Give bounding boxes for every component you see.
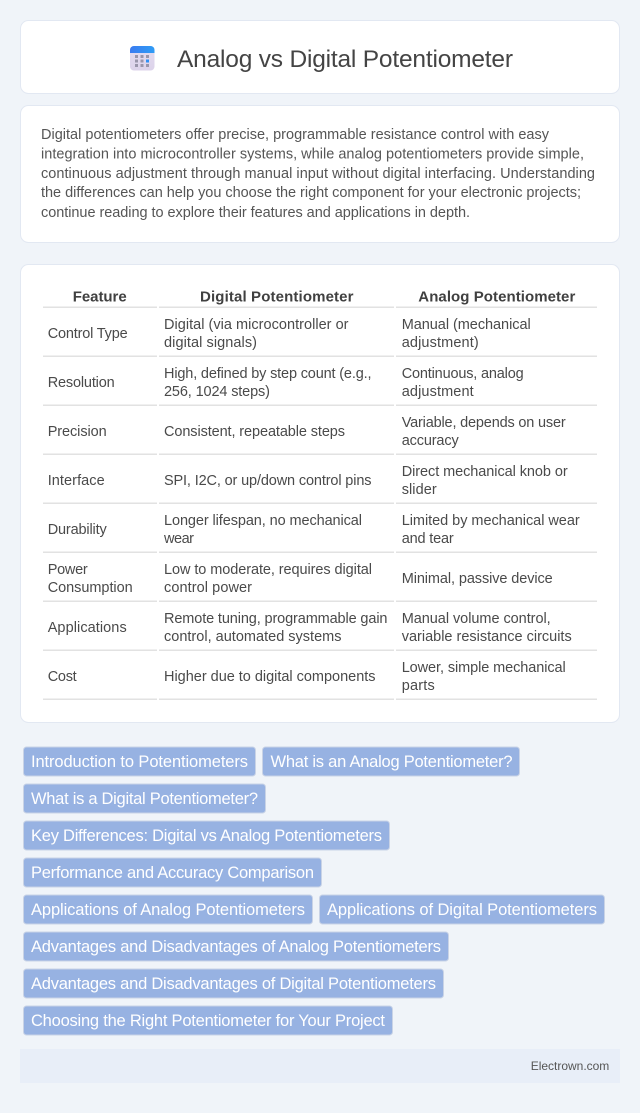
row: interface [43, 464, 597, 503]
text block: introduction [41, 127, 595, 221]
row: durability: and tear [402, 531, 454, 547]
row: control type: Digital (via microcontroller or [164, 317, 349, 333]
row: power consumption: Low to moderate, requires digital [164, 562, 372, 578]
row: precision [43, 415, 597, 454]
title: Analog vs Digital Potentiometer [177, 46, 513, 73]
row: resolution: Resolution [48, 375, 115, 391]
row: control type [43, 317, 597, 356]
row: resolution: adjustment [402, 384, 474, 400]
row: cost: Higher due to digital components [164, 669, 376, 685]
row: cost: parts [402, 678, 435, 694]
table header: Feature [73, 289, 127, 306]
text block: introduction: integration into microcontroller systems, while analog potentiometers provide simple, [41, 146, 584, 162]
tag: performance: Performance and Accuracy Comparison [31, 864, 314, 882]
row: precision: Consistent, repeatable steps [164, 424, 345, 440]
row: durability: Longer lifespan, no mechanical [164, 513, 362, 529]
row: power consumption: Minimal, passive device [402, 571, 553, 587]
tag: digital pros and cons: Advantages and Disadvantages of Digital Potentiometers [31, 975, 436, 993]
tag: digital pros and cons [24, 969, 444, 998]
row: interface: Direct mechanical knob or [402, 464, 568, 480]
row: applications: Applications [48, 620, 127, 636]
row: interface: Interface [48, 473, 105, 489]
row: resolution: High, defined by step count (e.g., [164, 366, 372, 382]
tag: analog applications [24, 895, 312, 924]
row: cost [43, 660, 597, 699]
row: durability: Limited by mechanical wear [402, 513, 580, 529]
row: control type: digital signals) [164, 335, 257, 351]
panel: header [20, 20, 620, 94]
tag: introduction [24, 747, 256, 776]
row: durability: Durability [48, 522, 107, 538]
table header: Analog Potentiometer [418, 289, 575, 306]
table header [43, 289, 597, 307]
text block: introduction: continuous adjustment through manual input without digital interfacing. Understanding [41, 166, 595, 182]
row: interface: SPI, I2C, or up/down control pins [164, 473, 372, 489]
tag: choosing [24, 1006, 392, 1035]
panel: introduction [20, 106, 620, 242]
icon: calendar [130, 46, 154, 70]
row: durability: wear [163, 531, 194, 547]
row: durability [43, 513, 597, 552]
panel: comparison table [20, 264, 620, 722]
row: applications: Remote tuning, programmable gain [164, 611, 388, 627]
row: power consumption: Consumption [48, 580, 133, 596]
text block: introduction: continue reading to explore their features and applications in depth. [41, 205, 470, 221]
tag: key differences [24, 821, 390, 850]
row: applications: control, automated systems [164, 629, 342, 645]
tag: digital definition [24, 784, 266, 813]
row: precision: accuracy [402, 433, 459, 449]
row: resolution: 256, 1024 steps) [164, 384, 270, 400]
tag: analog applications: Applications of Analog Potentiometers [31, 901, 305, 919]
tag: digital definition: What is a Digital Potentiometer? [31, 790, 258, 808]
row: applications: Manual volume control, [402, 611, 551, 627]
row: applications: variable resistance circuits [402, 629, 572, 645]
row: control type: Manual (mechanical [402, 317, 531, 333]
tag: introduction: Introduction to Potentiometers [31, 753, 248, 771]
tag: choosing: Choosing the Right Potentiometer for Your Project [31, 1012, 385, 1030]
tag: analog pros and cons [24, 932, 448, 961]
tag: analog definition [262, 747, 520, 776]
row: power consumption [43, 562, 597, 601]
table header: Digital Potentiometer [200, 289, 354, 306]
footer [20, 1049, 620, 1083]
tag: analog definition: What is an Analog Potentiometer? [270, 753, 512, 771]
tag: performance [24, 858, 322, 887]
row: power consumption: control power [164, 580, 252, 596]
row: cost: Cost [48, 669, 77, 685]
row: applications [43, 611, 597, 650]
footer credit: Electrown.com [531, 1059, 609, 1073]
row: precision: Precision [48, 424, 107, 440]
row: interface: slider [402, 482, 437, 498]
text block: introduction: the differences can help you choose the right component for your electronic projects; [41, 185, 581, 201]
row: control type: adjustment) [402, 335, 479, 351]
text block: introduction: Digital potentiometers offer precise, programmable resistance control with easy [41, 127, 550, 143]
tag: key differences: Key Differences: Digital vs Analog Potentiometers [31, 827, 382, 845]
navigation tags [24, 747, 604, 1035]
row: cost: Lower, simple mechanical [402, 660, 566, 676]
tag: digital applications: Applications of Digital Potentiometers [327, 901, 597, 919]
tag: digital applications [320, 895, 604, 924]
row: power consumption: Power [48, 562, 88, 578]
row: control type: Control Type [48, 326, 128, 342]
row: resolution [43, 366, 597, 405]
tag: analog pros and cons: Advantages and Disadvantages of Analog Potentiometers [31, 938, 441, 956]
row: resolution: Continuous, analog [402, 366, 524, 382]
row: precision: Variable, depends on user [402, 415, 566, 431]
